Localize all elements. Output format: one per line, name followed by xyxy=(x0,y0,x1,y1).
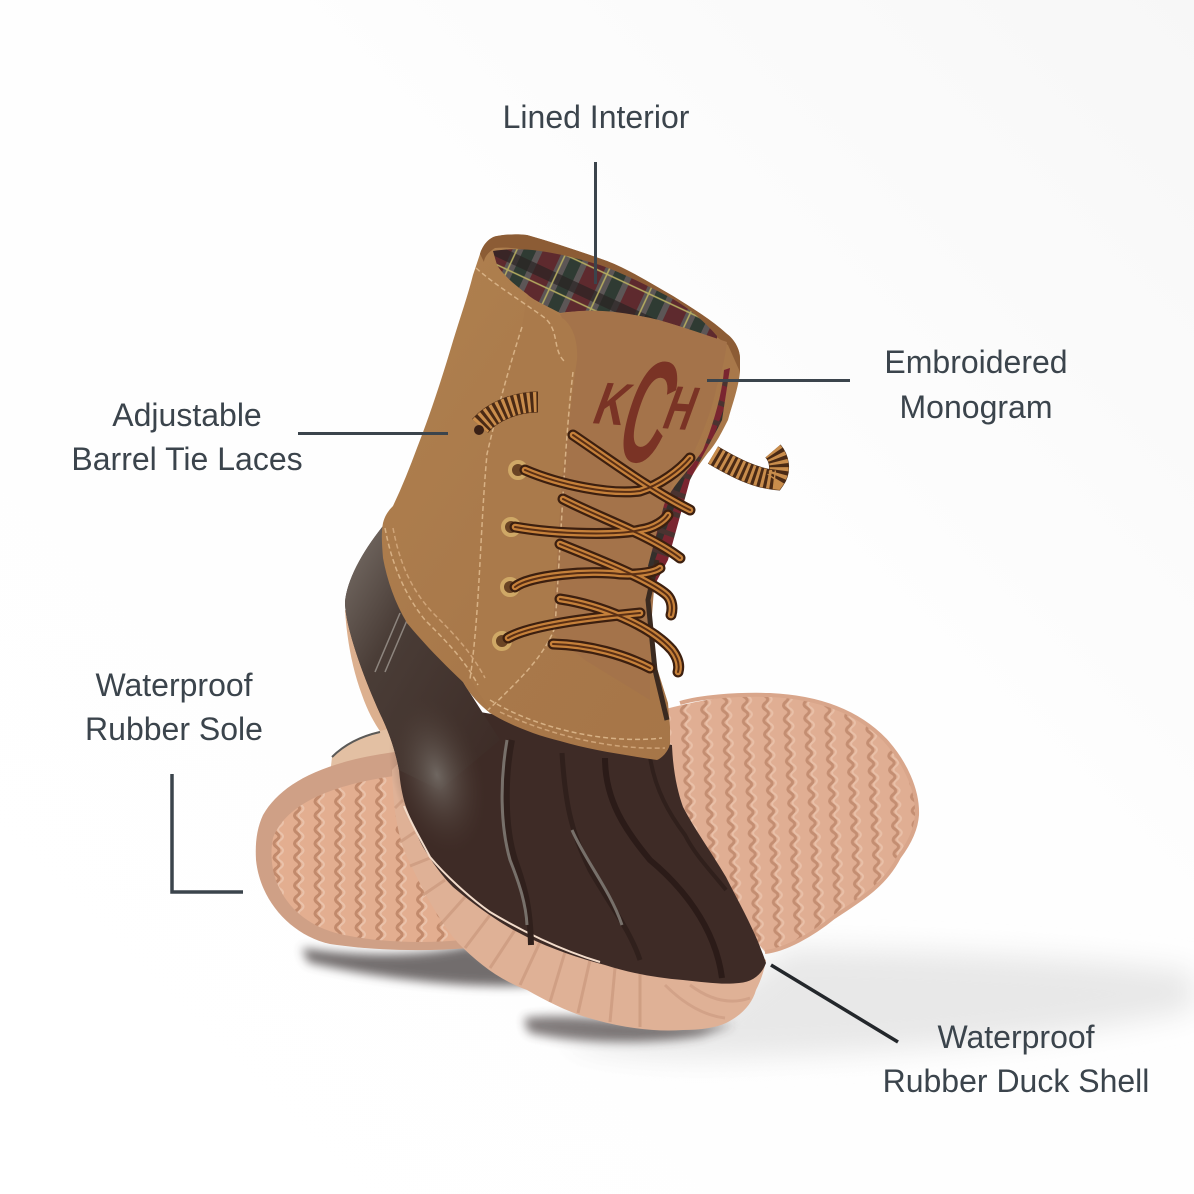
outsole ridges xyxy=(395,800,750,1027)
label: embroidered monogram: Monogram xyxy=(900,389,1052,425)
label: waterproof rubber duck shell: Waterproof xyxy=(937,1019,1095,1055)
monogram: C xyxy=(602,331,696,494)
rubber duck shell xyxy=(345,526,766,984)
rubber outsole xyxy=(392,740,766,1031)
shell double highlight lines xyxy=(375,613,408,672)
rubber sheen xyxy=(373,686,501,864)
label: lined interior: Lined Interior xyxy=(503,99,690,135)
left panel flap xyxy=(470,296,577,710)
leader: barrel tie laces xyxy=(298,432,448,435)
label: waterproof rubber duck shell: Rubber Duck Shell xyxy=(883,1063,1149,1099)
main boot xyxy=(345,234,779,1031)
back boot sole, right xyxy=(640,695,917,952)
plaid lining xyxy=(493,249,717,340)
leader: embroidered monogram xyxy=(707,379,850,382)
leader: lined interior xyxy=(594,162,597,284)
eyelets xyxy=(494,462,526,649)
leader: duck shell xyxy=(771,965,898,1042)
left boot side xyxy=(330,728,402,775)
plaid gusset xyxy=(648,368,730,590)
leader: rubber sole xyxy=(172,774,243,892)
shell ribs xyxy=(502,740,726,978)
monogram: H xyxy=(655,374,707,444)
monogram: K xyxy=(585,371,640,438)
left sole tread xyxy=(272,776,462,942)
back boot sole, left xyxy=(256,728,470,950)
barrel lace tie, right xyxy=(713,451,779,480)
floor shadows xyxy=(302,945,1194,1058)
barrel lace tie, left xyxy=(474,402,538,435)
laces xyxy=(508,435,690,672)
collar rim xyxy=(480,234,740,372)
label: adjustable barrel tie laces: Adjustable xyxy=(112,397,262,433)
label: embroidered monogram: Embroidered xyxy=(884,344,1068,380)
label: adjustable barrel tie laces: Barrel Tie Laces xyxy=(71,441,303,477)
tongue xyxy=(553,311,727,700)
dark tongue edge xyxy=(648,560,667,720)
white edge along outsole xyxy=(404,806,600,962)
left sole rim xyxy=(256,752,470,950)
label: waterproof rubber sole: Rubber Sole xyxy=(85,711,263,747)
label: waterproof rubber sole: Waterproof xyxy=(95,667,253,703)
leather stitching xyxy=(385,268,665,748)
main boot heel sole xyxy=(345,610,405,740)
shell top gradient xyxy=(345,526,500,790)
leather upper xyxy=(382,234,740,760)
